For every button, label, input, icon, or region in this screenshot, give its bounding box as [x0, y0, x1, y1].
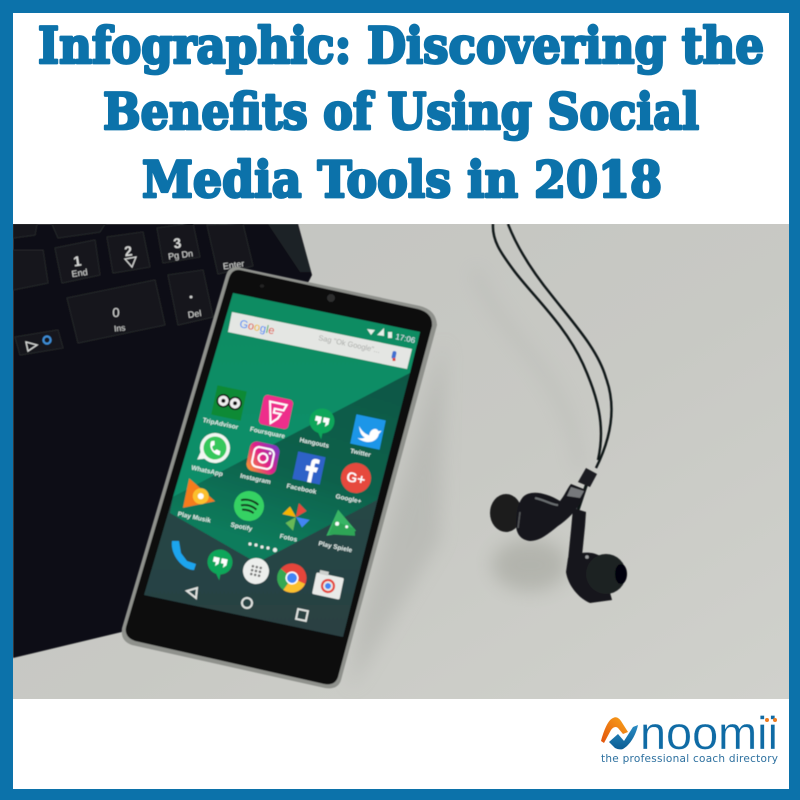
wires [493, 224, 601, 460]
logo dots [765, 718, 777, 722]
app: Fotos: Fotos [279, 533, 298, 544]
phone [122, 267, 437, 688]
dock: chrome [274, 561, 309, 595]
phone body [126, 270, 432, 684]
earphone shadow [492, 539, 568, 591]
left earbud tip [490, 494, 522, 532]
dock: phone [172, 541, 196, 570]
key labels: Enter [222, 259, 245, 271]
key labels: 2 [123, 243, 133, 260]
dock: apps [242, 557, 270, 585]
title: Benefits of Using Social [103, 82, 699, 141]
photo: phone and earphones on desk [13, 223, 789, 699]
app: Fotos [279, 502, 310, 542]
app: Spotify [230, 490, 265, 533]
logo mark [601, 717, 638, 749]
app: Play Spiele [318, 509, 356, 553]
app: Foursquare: Foursquare [249, 426, 286, 440]
google search bar: Google [238, 318, 276, 337]
app: Facebook: Facebook [286, 483, 317, 496]
dock: hangouts [206, 548, 234, 580]
front camera [327, 294, 335, 302]
screen [144, 293, 420, 637]
key labels [26, 235, 245, 351]
right earbud tip [586, 554, 626, 594]
screen: 17:06 [395, 332, 417, 345]
app: Twitter: Twitter [349, 448, 372, 459]
right earbud body [566, 553, 612, 603]
noomii logo [601, 707, 778, 765]
right earbud stem [568, 508, 586, 560]
app: Hangouts [298, 408, 335, 449]
earphone wire shadows [475, 270, 580, 470]
logo tagline: the professional coach directory [601, 753, 778, 765]
google search bar: Sag "Ok Google"... [318, 333, 381, 355]
phone shadow [358, 394, 440, 660]
logo wordmark: noomii [640, 707, 778, 759]
app: Play Musik: Play Musik [177, 511, 212, 525]
app: WhatsApp: WhatsApp [191, 465, 223, 478]
app: Play Spiele: Play Spiele [318, 540, 353, 554]
app: WhatsApp [191, 432, 231, 478]
app: Instagram: Instagram [239, 473, 272, 486]
app: Foursquare [249, 393, 294, 441]
key labels: End [71, 267, 88, 279]
dock: camera [312, 569, 345, 600]
app: Google+ [335, 462, 372, 504]
key labels: Pg Dn [168, 248, 194, 262]
title: Media Tools in 2018 [142, 150, 662, 209]
page dots [248, 542, 277, 552]
app: Hangouts: Hangouts [299, 437, 330, 450]
app: Play Musik [177, 478, 219, 525]
google search bar [228, 312, 412, 369]
key labels: 0 [112, 305, 120, 320]
strain relief [578, 468, 597, 487]
key labels: 3 [172, 235, 182, 252]
left earbud body [516, 484, 586, 541]
app: Google+: G+ [345, 468, 367, 488]
earphones [490, 224, 627, 603]
title [38, 16, 764, 209]
app icons [172, 384, 386, 600]
app: Google+: Google+ [335, 493, 362, 506]
navigation buttons [187, 588, 308, 621]
app: Instagram [239, 439, 281, 487]
key labels: Ins [114, 322, 126, 334]
app: Facebook [286, 451, 326, 496]
key labels: Del [187, 308, 202, 320]
app: Twitter [348, 414, 386, 461]
status bar [236, 312, 421, 344]
desk surface [13, 224, 789, 699]
laptop keyboard [13, 223, 312, 658]
app: TripAdvisor [202, 384, 247, 432]
app: TripAdvisor: TripAdvisor [202, 417, 239, 431]
app: Spotify: Spotify [230, 522, 253, 533]
phone case [122, 267, 437, 688]
key labels: 1 [72, 253, 82, 270]
